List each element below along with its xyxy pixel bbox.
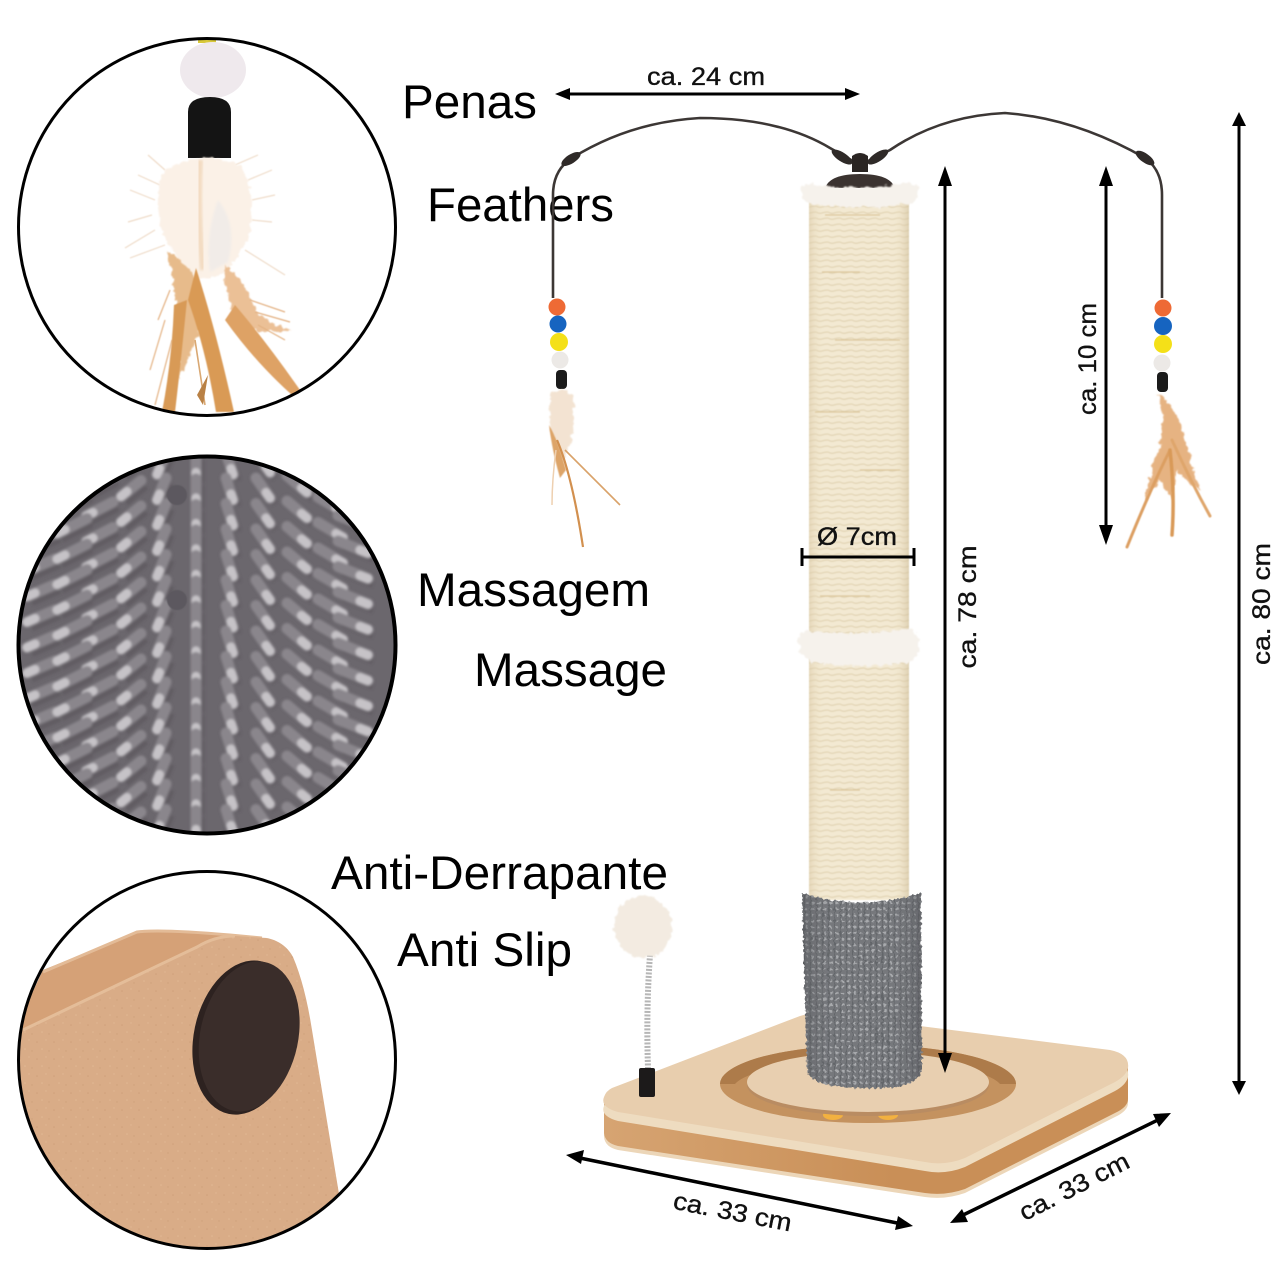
dimension: height 78 cm [938,166,982,1073]
wire toy left [548,118,860,547]
icon: black non-slip pad [192,960,300,1115]
groove ring [720,1045,1016,1123]
dimension: base width 33 cm [950,1113,1171,1227]
dimension: diameter 7 cm [802,523,914,566]
icon: large feather [125,155,300,412]
heading: Massagem: Massagem [417,563,650,616]
hub [852,153,868,172]
wooden base [603,1013,1128,1198]
orange balls [823,1110,843,1120]
panel: massage bristles detail circle [17,427,397,860]
feather right [1127,394,1210,547]
dimension: height 10 cm [1074,166,1113,545]
sisal column [809,200,909,900]
dimension: width 24 cm [555,63,860,100]
heading: Massage: Massage [474,643,667,696]
heading: Anti-Derrapante: Anti-Derrapante [331,846,668,899]
plush collar top and dome [801,174,918,207]
icon: black cap [188,97,231,158]
dimension: base depth 33 cm: ca. 33 cm [671,1187,794,1237]
dimension: height 78 cm: ca. 78 cm [954,545,982,669]
brush sleeve [802,893,922,1088]
dimension: width 24 cm: ca. 24 cm [647,63,765,91]
wire toy right [860,113,1210,547]
dimension: base depth 33 cm [566,1150,913,1237]
icon: round mold marks [167,485,187,610]
dimension: base width 33 cm: ca. 33 cm [1015,1147,1134,1227]
feather left [549,390,620,547]
dimension: height 80 cm [1232,112,1276,1095]
heading: Feathers: Feathers [427,178,614,231]
panel: anti slip detail circle [10,871,396,1260]
cork front surface [10,936,340,1260]
dimension: height 80 cm: ca. 80 cm [1248,543,1276,665]
dimension: height 10 cm: ca. 10 cm [1074,303,1102,415]
panel: feathers detail circle [18,38,396,416]
product: scratching post [548,113,1210,1198]
dimension: diameter 7 cm: Ø 7cm [817,523,897,551]
plush collar middle [799,629,919,666]
heading: Anti Slip: Anti Slip [397,923,572,976]
icon: white bead [180,42,246,98]
cork recessed back edge [22,932,223,1030]
centre disc [747,1054,989,1116]
heading: Penas: Penas [402,75,537,128]
pom toy [614,896,672,1097]
icon: yellow bead top [198,40,216,43]
